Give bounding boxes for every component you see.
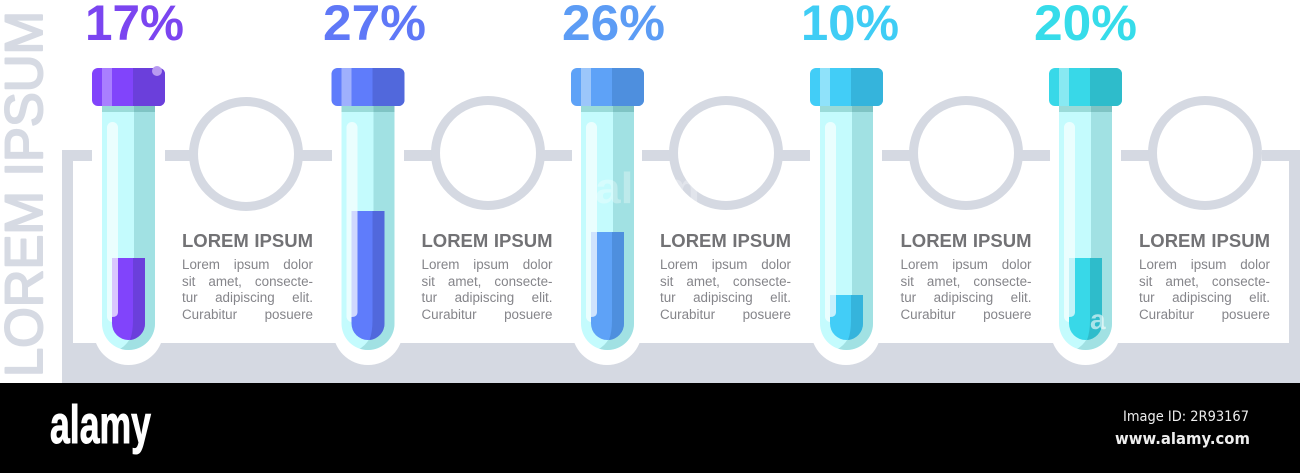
text block 4: LOREM IPSUM — [900, 230, 1032, 251]
text block 1: LOREM IPSUM — [182, 230, 313, 251]
text block 5: sit amet, consecte- — [1139, 274, 1270, 289]
text block 4: tur adipiscing elit. — [900, 290, 1032, 305]
text block 3: Lorem ipsum dolor — [660, 257, 791, 272]
text block 5 — [1139, 230, 1270, 322]
text block 3: sit amet, consecte- — [660, 274, 791, 289]
faint watermark on tube 3: alam — [595, 164, 700, 213]
text block 1 — [182, 230, 313, 322]
test tube 4 — [810, 68, 883, 350]
ring 2 — [436, 100, 540, 206]
rack frame — [62, 150, 1300, 383]
text block 2: Lorem ipsum dolor — [422, 257, 552, 272]
text block 4: Curabitur posuere — [900, 307, 1032, 322]
text block 3 — [660, 230, 791, 322]
website: www.alamy.com — [1115, 429, 1250, 448]
test tube 1 — [92, 66, 165, 350]
text block 1: tur adipiscing elit. — [182, 290, 313, 305]
alamy logo: alamy — [50, 395, 151, 455]
text block 3: tur adipiscing elit. — [660, 290, 791, 305]
image id: Image ID: 2R93167 — [1123, 409, 1249, 425]
text block 1: Lorem ipsum dolor — [182, 257, 313, 272]
text block 2: tur adipiscing elit. — [422, 290, 552, 305]
footer band — [0, 383, 1300, 473]
test tube 5 — [1049, 68, 1122, 350]
test tube 2 — [332, 68, 404, 350]
ring 5 — [1152, 100, 1258, 206]
ring 3 — [674, 100, 778, 206]
text block 4: Lorem ipsum dolor — [900, 257, 1032, 272]
text block 5: Lorem ipsum dolor — [1139, 257, 1270, 272]
text block 5: LOREM IPSUM — [1139, 230, 1270, 251]
text block 4: sit amet, consecte- — [900, 274, 1032, 289]
text block 2: sit amet, consecte- — [422, 274, 552, 289]
text block 1: Curabitur posuere — [182, 307, 313, 322]
text block 3: LOREM IPSUM — [660, 230, 791, 251]
faint watermark on tube 5: a — [1090, 304, 1106, 335]
test tube 3 — [571, 68, 644, 350]
text block 3: Curabitur posuere — [660, 307, 791, 322]
ring 1 — [194, 102, 298, 206]
text block 5: tur adipiscing elit. — [1139, 290, 1270, 305]
text block 1: sit amet, consecte- — [182, 274, 313, 289]
text block 2 — [422, 230, 552, 322]
text block 4 — [900, 230, 1032, 322]
text block 2: Curabitur posuere — [422, 307, 552, 322]
ring 4 — [914, 100, 1018, 206]
text block 2: LOREM IPSUM — [422, 230, 552, 251]
text block 5: Curabitur posuere — [1139, 307, 1270, 322]
